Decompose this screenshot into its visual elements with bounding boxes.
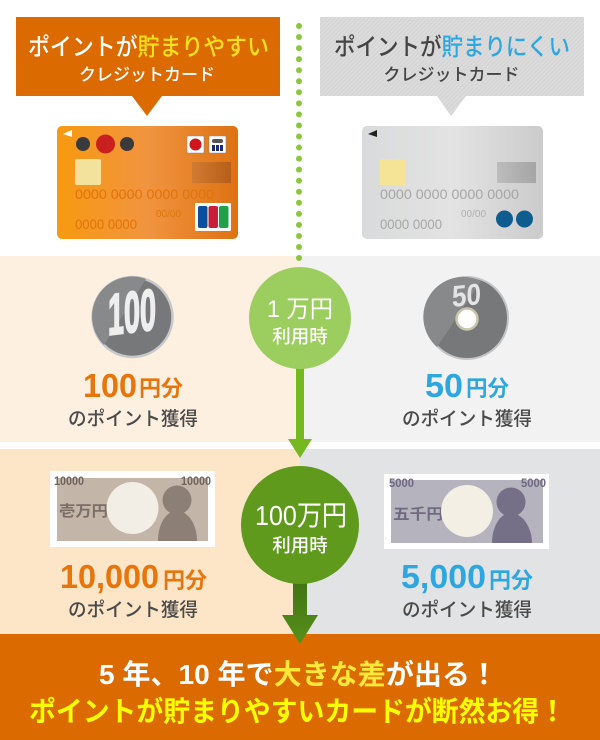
reward: 5,000 yen: 円分 (489, 568, 533, 593)
reward: 100 yen: のポイント獲得 (68, 408, 198, 430)
banknote: 5,000 yen: 五千円 (393, 506, 443, 523)
background band: 1,000,000 yen row right (300, 449, 600, 635)
orange credit card: 0000 0000 (75, 216, 137, 232)
circle label: 10,000 yen used (249, 267, 351, 369)
circle label: 10,000 yen used: 利用時 (272, 326, 328, 347)
banknote: 5,000 yen: 5000 (389, 476, 414, 490)
coin: 100 yen (92, 276, 172, 357)
silver credit card (362, 126, 543, 239)
heading: easy to accumulate (16, 17, 280, 116)
background band: 10,000 yen row right (300, 256, 600, 442)
coin: 50 yen (423, 277, 508, 359)
banknote: 10,000 yen: 壱万円 (59, 503, 108, 520)
reward: 10,000 yen: 10,000 (60, 558, 159, 595)
silver credit card: 0000 0000 0000 0000 (380, 186, 519, 202)
circle label: 10,000 yen used: 1 万円 (267, 296, 333, 323)
circle label: 1,000,000 yen used: 利用時 (272, 535, 328, 556)
circle label: 1,000,000 yen used: 100万円 (255, 500, 347, 531)
reward: 5,000 yen: のポイント獲得 (402, 599, 532, 621)
orange credit card: 00/00 (156, 209, 181, 220)
coin: 50 yen: 50 (452, 278, 481, 314)
reward: 50 yen: のポイント獲得 (402, 408, 532, 430)
reward: 5,000 yen: 5,000 (401, 558, 486, 595)
dotted divider line (296, 26, 302, 259)
banknote: 10,000 yen: 10000 (181, 474, 211, 488)
background band: 1,000,000 yen row left (0, 449, 300, 635)
circle label: 1,000,000 yen used (241, 466, 359, 584)
heading: easy to accumulate: ポイントが貯まりやすい (28, 34, 269, 61)
silver credit card: 00/00 (461, 209, 486, 220)
coin: 100 yen: 100 (108, 277, 156, 348)
closing message (29, 658, 566, 727)
orange credit card: 0000 0000 0000 0000 (75, 186, 214, 202)
heading: hard to accumulate: ポイントが貯まりにくい (334, 34, 570, 61)
banknote: 5,000 yen: 5000 (521, 476, 546, 490)
reward: 50 yen: 円分 (466, 376, 509, 401)
arrow: 1,000,000 yen (282, 580, 318, 644)
reward: 100 yen: 円分 (139, 376, 183, 401)
reward: 10,000 yen: のポイント獲得 (68, 599, 198, 621)
closing banner (0, 634, 600, 740)
reward: 50 yen (402, 367, 532, 430)
arrow: 10,000 yen (288, 365, 312, 458)
reward: 100 yen: 100 (83, 367, 137, 404)
reward: 100 yen (68, 367, 198, 430)
background band: 10,000 yen row left (0, 256, 300, 442)
closing message: 5 年、10 年で大きな差が出る！ (99, 658, 498, 690)
reward: 10,000 yen (60, 558, 207, 621)
heading: easy to accumulate: クレジットカード (79, 66, 215, 84)
reward: 50 yen: 50 (425, 367, 463, 404)
banknote: 5,000 yen (384, 474, 549, 549)
reward: 5,000 yen (401, 558, 533, 621)
heading: hard to accumulate (320, 17, 584, 116)
banknote: 10,000 yen: 10000 (54, 474, 84, 488)
heading: hard to accumulate: クレジットカード (384, 66, 520, 84)
orange credit card (57, 126, 238, 239)
reward: 10,000 yen: 円分 (163, 568, 207, 593)
silver credit card: 0000 0000 (380, 216, 442, 232)
banknote: 10,000 yen (50, 471, 215, 547)
closing message: ポイントが貯まりやすいカードが断然お得！ (29, 695, 566, 727)
